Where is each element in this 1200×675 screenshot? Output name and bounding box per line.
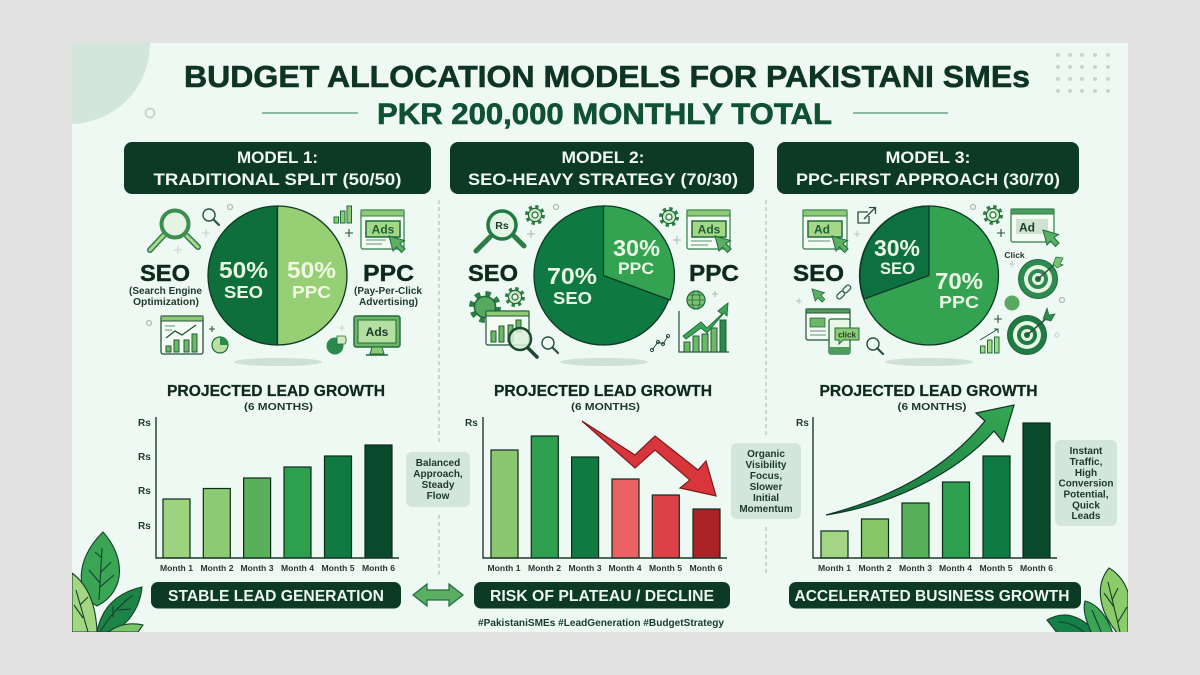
banner: stable lead generation [151,582,401,608]
hashtags: #PakistaniSMEs #LeadGeneration #BudgetStrategy [478,617,724,629]
model 3 header: MODEL 3: [886,148,970,167]
icon: Rs magnifier: Rs [495,220,509,232]
bar chart: model 3: Month 3 [899,563,932,573]
model 2 header: SEO-HEAVY STRATEGY (70/30) [468,170,738,189]
icon: chain link [836,284,852,300]
leaves: bottom right [1047,568,1128,634]
bar chart: model 2 [465,417,727,573]
decorative corner circle [72,43,150,124]
icon: ads window: Ads [372,222,395,236]
panel: model 3 [777,142,1117,608]
pie chart: 30/70: PPC [939,292,979,312]
icon: small bars [334,206,352,223]
icon: ads window [361,210,405,252]
model 1 header: TRADITIONAL SPLIT (50/50) [154,170,402,189]
leaves: bottom left [72,532,143,632]
icon: ad window right: Ad [1019,220,1035,234]
heading: projected lead growth [820,383,1038,413]
callout: instant traffic: Conversion [1058,478,1114,490]
callout: instant traffic: Quick [1072,500,1100,512]
bar chart: model 1: Month 3 [240,563,274,573]
pie chart: 30/70: 30% [874,235,920,261]
bar chart: model 3 [796,417,1057,573]
bar chart: model 3: Rs [796,418,809,429]
pie chart: 50/50: PPC [292,282,331,302]
icon: small bars with trend [980,329,999,353]
icon: target bottom [1008,308,1055,354]
PPC label: (Pay-Per-Click [354,286,422,297]
PPC label: PPC [363,260,414,286]
icon: pie left [212,337,228,353]
icon: chart window [161,316,203,354]
icon: growth chart [679,303,729,352]
heading: projected lead growth [167,383,385,413]
icon: monitor ads [354,316,400,355]
icon: ad window [803,210,848,252]
callout: organic visibility [731,443,801,519]
model 2 header [450,142,754,194]
callout: instant traffic: High [1075,468,1097,479]
background panel [72,43,1128,632]
model 1 header: MODEL 1: [237,148,318,167]
PPC label: PPC [689,260,739,286]
bar chart: model 1: Month 5 [322,563,355,573]
bar chart: model 2: Month 5 [649,563,682,573]
icon: pie right [326,336,346,354]
callout: organic visibility: Slower [750,482,782,493]
bar chart: model 1: Month 1 [160,563,193,573]
icon: gear right [661,209,677,225]
arrow: green growth [826,405,1014,515]
small ring [146,108,154,118]
callout: organic visibility: Organic [747,449,785,460]
icon: gear [527,207,543,223]
SEO label: SEO [468,260,518,286]
icon: gears, window and magnifier [472,289,537,357]
SEO label [129,260,202,308]
pie chart: 50/50: 50% [287,257,336,283]
icon: browser and phone: click [838,330,856,340]
pie chart: 70/30 [534,206,674,366]
arrow: red decline [582,421,716,496]
pie chart: 30/70: SEO [880,259,915,278]
heading: projected lead growth: PROJECTED LEAD GROWTH [494,383,712,400]
pie chart: 50/50 [208,206,347,366]
subtitle: PKR 200,000 MONTHLY TOTAL [377,98,832,131]
bar chart: model 1: Month 6 [362,563,395,573]
heading: projected lead growth: PROJECTED LEAD GROWTH [167,383,385,400]
pie chart: 70/30: PPC [618,259,654,278]
bar chart: model 3: Month 2 [858,563,892,573]
callout: instant traffic [1055,440,1117,526]
icon: external link [858,208,876,223]
bar chart: model 2: Month 2 [528,563,561,573]
dot grid [1056,53,1110,93]
icon: double arrow [413,584,463,606]
SEO label: SEO [793,260,844,286]
pie chart: 70/30: 30% [613,235,660,261]
banner: risk of plateau: RISK OF PLATEAU / DECLINE [490,588,714,605]
icon: cursor small [812,289,825,302]
heading: projected lead growth: (6 MONTHS) [244,401,313,413]
pie chart: 50/50: SEO [224,282,263,302]
PPC label: Advertising) [359,297,418,308]
pie chart: 50/50: 50% [219,257,268,283]
pie chart: 70/30: 70% [547,263,597,289]
callout: organic visibility: Momentum [739,504,793,515]
banner: accelerated business growth [789,582,1081,608]
pie chart: 70/30: SEO [553,288,592,308]
banner: stable lead generation: STABLE LEAD GENERATION [168,588,384,605]
callout: instant traffic: Traffic, [1070,457,1103,468]
callout: instant traffic: Leads [1072,511,1101,522]
bar chart: model 2: Month 4 [608,563,642,573]
heading: projected lead growth [494,383,712,413]
icon: gear [985,207,1001,223]
icon: target top [1018,257,1063,298]
icon: small magnifier [542,337,558,353]
pie chart: 30/70: 70% [935,268,983,294]
bar chart: model 3: Month 6 [1020,563,1053,573]
bar chart: model 2: Month 1 [488,563,521,573]
panel: model 1 [124,142,470,608]
callout: balanced approach: Balanced [416,458,460,469]
label: click: Click [1004,250,1025,260]
callout: organic visibility: Initial [753,493,779,504]
bar chart: model 1: Month 2 [200,563,234,573]
title: BUDGET ALLOCATION MODELS FOR PAKISTANI SMEs [184,59,1030,94]
pie chart: 30/70 [860,206,998,366]
icon: badge [1004,296,1020,310]
panel: model 2 [450,142,801,608]
callout: balanced approach: Approach, [413,469,463,480]
model 3 header [777,142,1079,194]
SEO label: (Search Engine [129,286,202,297]
SEO label: Optimization) [133,297,199,308]
bar chart: model 1: Rs [138,418,151,429]
heading: projected lead growth: PROJECTED LEAD GROWTH [820,383,1038,400]
callout: balanced approach: Flow [427,491,450,502]
bar chart: model 3: Month 5 [980,563,1013,573]
callout: organic visibility: Focus, [750,471,782,482]
bar chart: model 1: Month 4 [281,563,314,573]
banner: risk of plateau [474,582,730,608]
PPC label [354,260,422,308]
callout: instant traffic: Potential, [1063,490,1109,500]
icon: monitor ads: Ads [366,325,389,339]
callout: balanced approach: Steady [422,480,455,491]
icon: globe [687,291,705,309]
icon: small magnifier [867,338,883,354]
icon: small magnifier [203,209,219,225]
icon: ad window: Ad [814,222,830,236]
icon: large magnifier [150,210,198,250]
model 2 header: MODEL 2: [562,148,644,167]
callout: organic visibility: Visibility [746,460,787,471]
bar chart: model 3: Month 1 [818,563,851,573]
bar chart: model 1: Rs [138,486,151,497]
SEO label: SEO [140,260,190,286]
bar chart: model 1 [138,417,399,573]
banner: accelerated business growth: ACCELERATED BUSINESS GROWTH [794,588,1070,605]
icon: small line graph [650,334,670,352]
model 3 header: PPC-FIRST APPROACH (30/70) [796,170,1060,189]
bar chart: model 2: Month 3 [568,563,602,573]
bar chart: model 3: Month 4 [939,563,972,573]
icon: ads window [687,210,731,252]
icon: Rs magnifier [476,211,524,251]
bar chart: model 2: Month 6 [690,563,723,573]
icon: browser and phone [806,309,859,354]
heading: projected lead growth: (6 MONTHS) [571,401,640,413]
bar chart: model 1: Rs [138,521,151,532]
bar chart: model 2: Rs [465,418,478,429]
bar chart: model 1: Rs [138,452,151,463]
callout: instant traffic: Instant [1070,446,1103,457]
model 1 header [124,142,431,194]
callout: balanced approach [406,452,470,507]
icon: ad window right [1011,209,1059,246]
heading: projected lead growth: (6 MONTHS) [898,401,966,413]
icon: ads window: Ads [698,222,721,236]
